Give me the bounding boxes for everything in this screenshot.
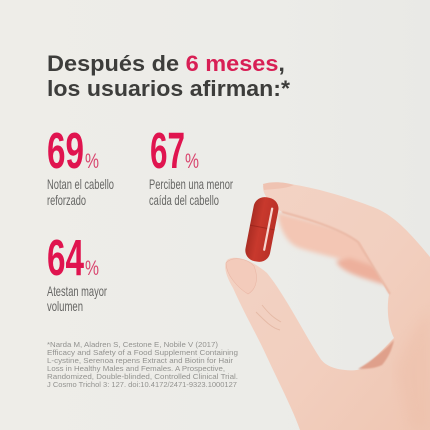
footnote reference: Loss in Healthy Males and Females. A Prospective,	[47, 364, 225, 373]
stat: 69%	[47, 122, 114, 208]
hand and thumb	[225, 183, 430, 430]
web shadow	[358, 340, 394, 369]
footnote reference: Efficacy and Safety of a Food Supplement Containing	[47, 348, 238, 357]
title: los usuarios afirman:*	[47, 76, 290, 101]
stat: 67%: caída del cabello	[149, 192, 219, 208]
stat: 64%: 64	[47, 229, 84, 286]
capsule	[243, 195, 280, 264]
title	[47, 51, 290, 101]
stat: 67%: Perciben una menor	[149, 176, 233, 192]
thumb nail	[226, 259, 256, 294]
footnote reference: Randomized, Double-blinded, Controlled Clinical Trial.	[47, 372, 238, 381]
footnote reference	[47, 340, 238, 389]
footnote reference: *Narda M, Aladren S, Cestone E, Nobile V (2017)	[47, 340, 218, 349]
stat: 69%: 69	[47, 122, 84, 179]
illustration: hand holding capsule	[225, 182, 430, 430]
footnote reference: J Cosmo Trichol 3: 127. doi:10.4172/2471-9323.1000127	[47, 380, 237, 389]
stat: 67%	[149, 122, 233, 208]
stat: 69%: reforzado	[47, 192, 86, 208]
stat: 69%: %	[85, 150, 99, 173]
index fingernail	[263, 182, 294, 190]
footnote reference: L-cystine, Serenoa repens Extract and Biotin for Hair	[47, 356, 234, 365]
knuckle creases	[256, 305, 281, 330]
title: Después de 6 meses,	[47, 51, 285, 76]
blurred back fingers	[277, 212, 392, 290]
stat: 64%	[47, 229, 107, 314]
stat: 64%: Atestan mayor	[47, 283, 107, 299]
stat: 64%: %	[85, 257, 99, 280]
stat: 67%: 67	[150, 122, 185, 179]
stat: 69%: Notan el cabello	[47, 176, 114, 192]
stat: 67%: %	[185, 150, 199, 173]
palm shading	[395, 310, 430, 430]
index finger shadow	[282, 212, 390, 294]
stat: 64%: volumen	[47, 298, 83, 314]
